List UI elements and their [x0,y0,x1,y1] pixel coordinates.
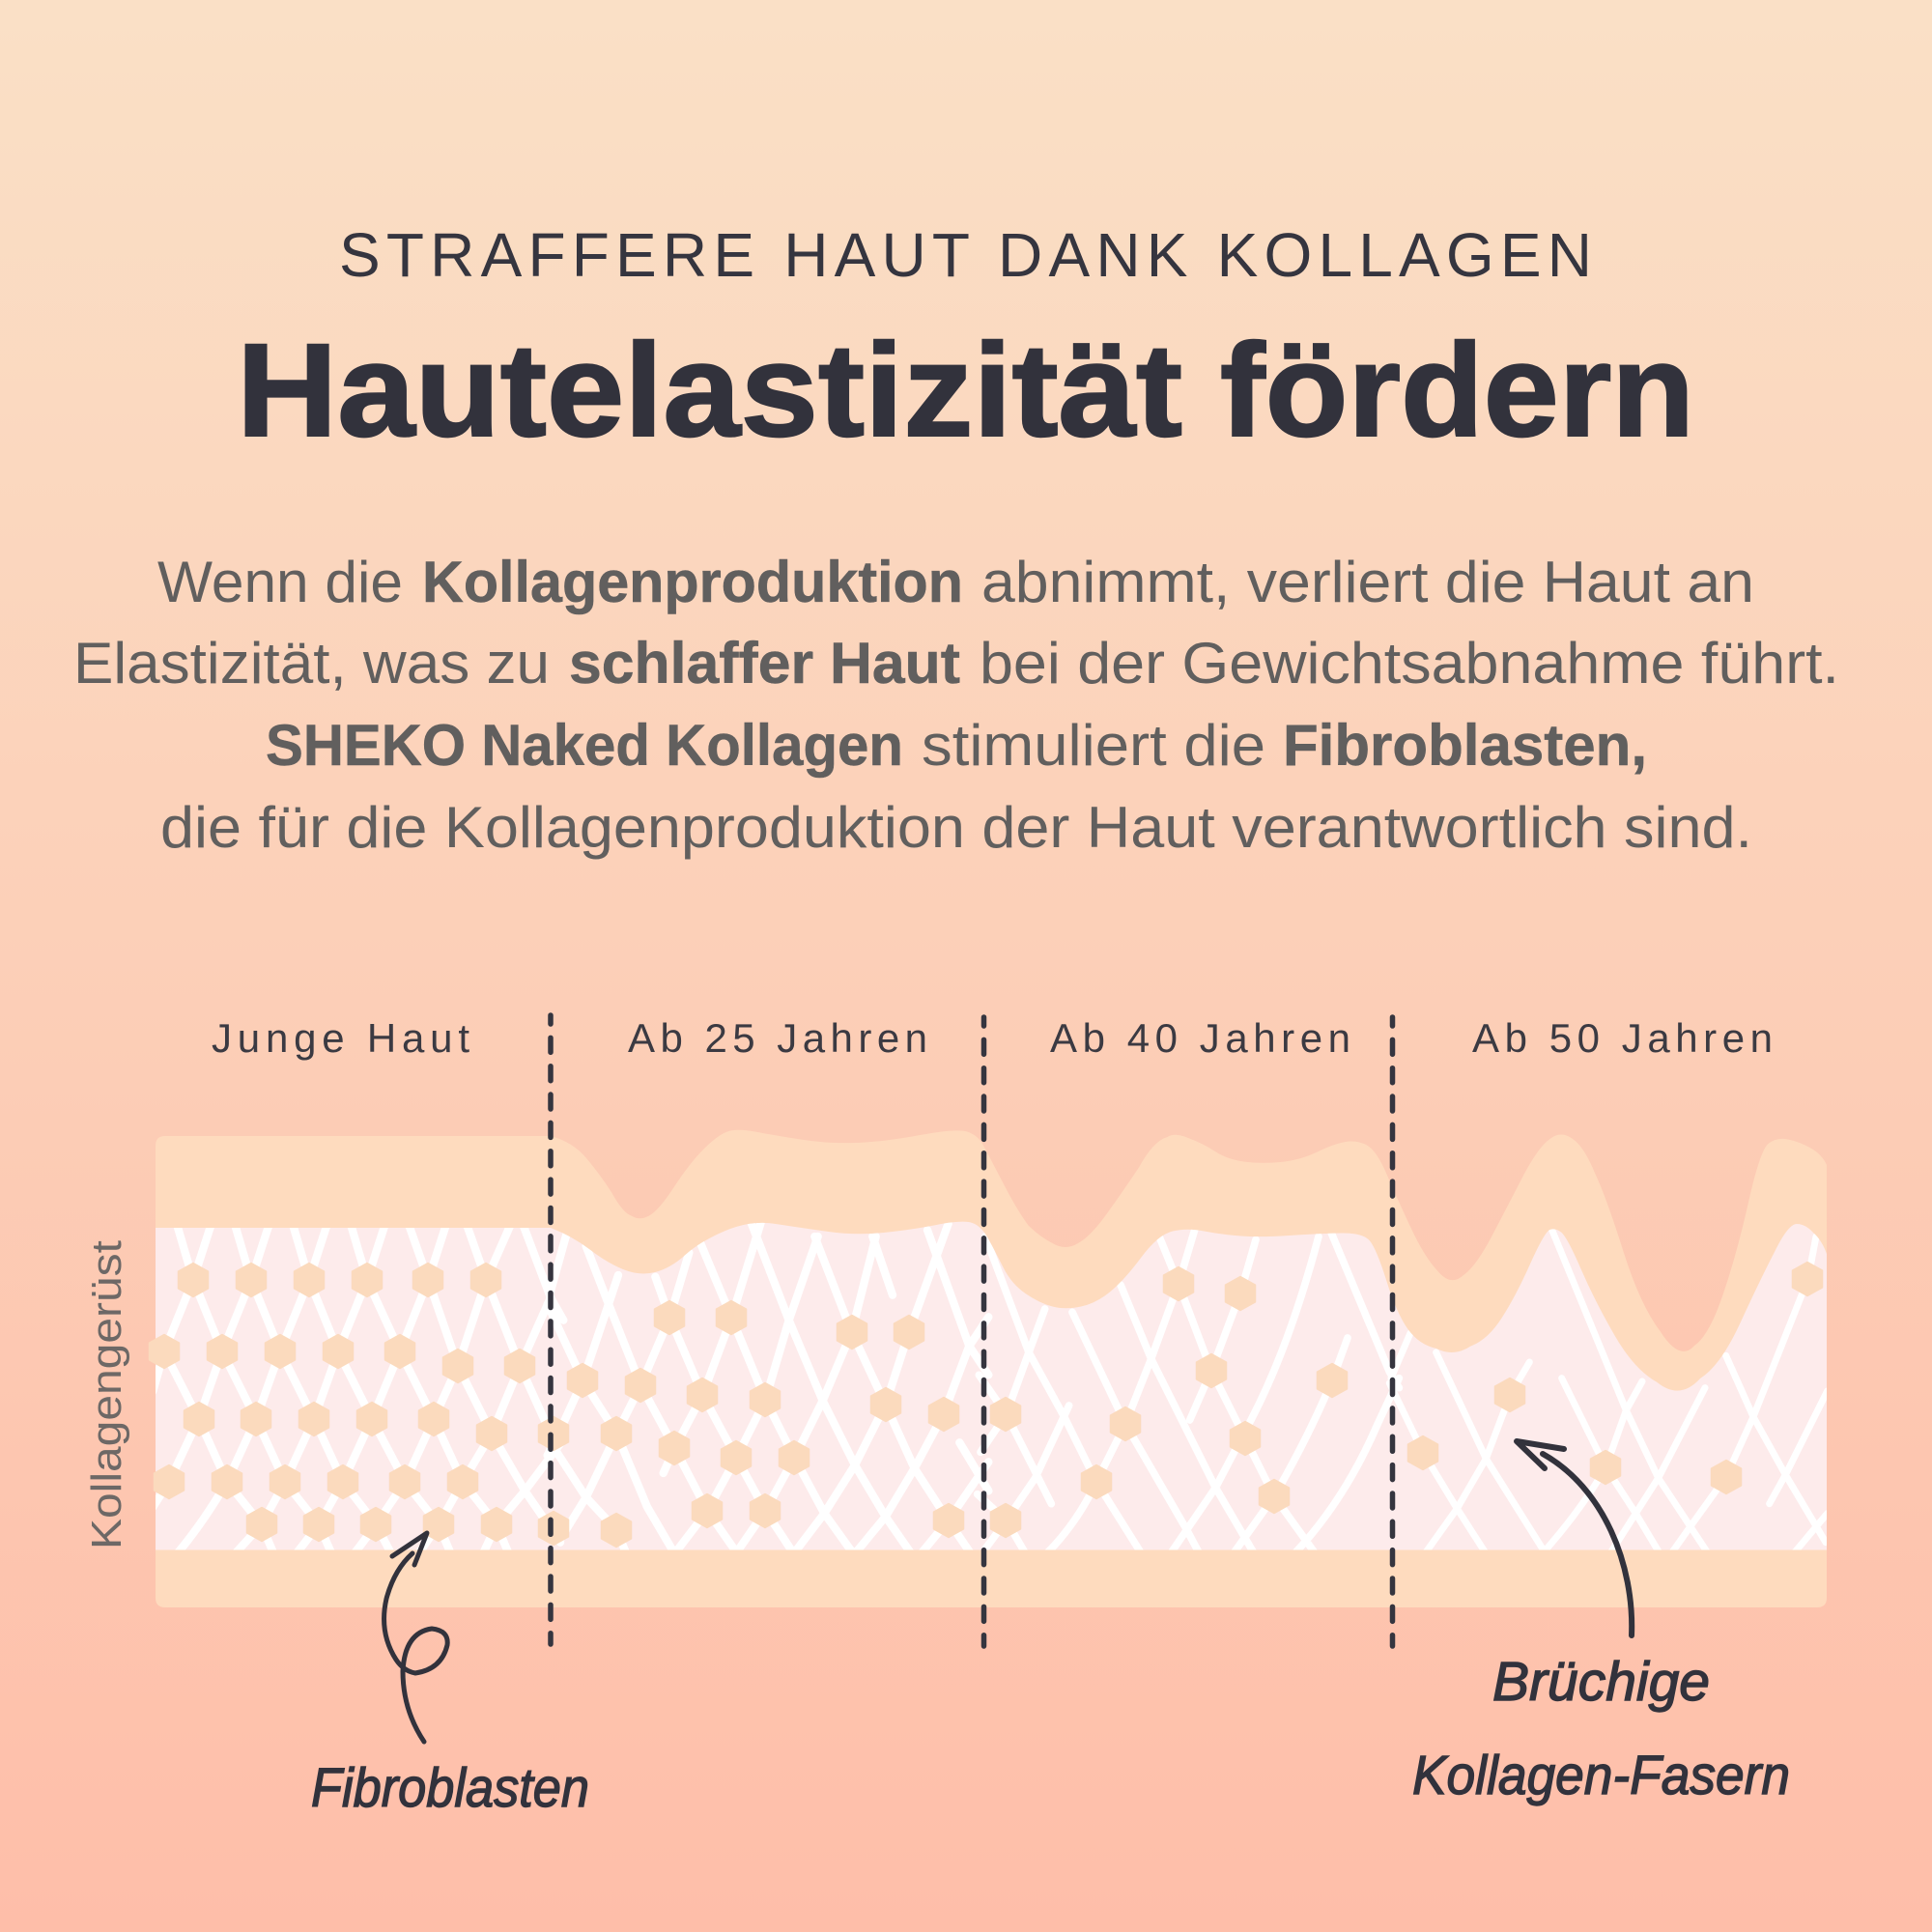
body line 2: Elastizität, was zu [73,631,550,696]
body paragraph [73,550,1839,860]
body line 3: SHEKO Naked Kollagen [266,713,903,778]
body line 4: die für die Kollagenproduktion der Haut verantwortlich sind. [160,795,1752,860]
cells: age 25 [568,1300,964,1548]
eyebrow heading: STRAFFERE HAUT DANK KOLLAGEN [339,220,1592,290]
cells: age 40 [991,1267,1347,1538]
arrow: to brittle fibres [1517,1441,1632,1635]
divider 2 [981,1017,986,1646]
arrow: to fibroblasts [384,1533,447,1742]
dermis layer [156,1222,1827,1549]
cells: age 50 [1408,1262,1822,1493]
fibres: age 50 lattice [1389,1230,1828,1553]
body line 3: Fibroblasten, [1283,713,1647,778]
main title [237,317,1694,465]
annotation: brittle collagen fibres [1412,1651,1790,1806]
body line 3 [266,713,1647,778]
body line 2 [73,631,1839,696]
label: from 50: Ab 50 Jahren [1472,1015,1773,1061]
dashed dividers [551,1015,1393,1646]
fibres: age 40 lattice [978,1230,1399,1553]
annotation: fibroblasts: Fibroblasten [311,1757,589,1819]
body line 1 [157,550,1754,614]
annotation line 1: Brüchige [1492,1651,1710,1713]
annotation line 2: Kollagen-Fasern [1412,1745,1790,1806]
vertical axis label: Kollagengerüst [83,1240,130,1549]
body line 1: Wenn die [157,550,403,614]
main title: Hautelastizität [237,317,1182,465]
body line 1: abnimmt, verliert die Haut an [981,550,1754,614]
divider 3 [1390,1017,1395,1646]
skin cross-section diagram [149,1130,1828,1607]
fibroblast cells [149,1262,1822,1548]
label: from 25: Ab 25 Jahren [628,1015,927,1061]
column labels [212,1015,1773,1061]
body line 2: bei der Gewichtsabnahme führt. [980,631,1839,696]
main title: fördern [1220,317,1694,465]
collagen fibres [153,1220,1828,1553]
body line 2: schlaffer Haut [569,631,960,696]
divider 1 [548,1015,554,1644]
label: from 40: Ab 40 Jahren [1050,1015,1350,1061]
label: young skin: Junge Haut [212,1015,469,1061]
body line 3: stimuliert die [922,713,1265,778]
fibres: young skin lattice [153,1225,563,1553]
body line 1: Kollagenproduktion [422,550,963,614]
fibres: age 25 lattice [548,1220,988,1553]
epidermis and lower tissue band [156,1130,1827,1607]
cells: young skin [149,1264,568,1546]
